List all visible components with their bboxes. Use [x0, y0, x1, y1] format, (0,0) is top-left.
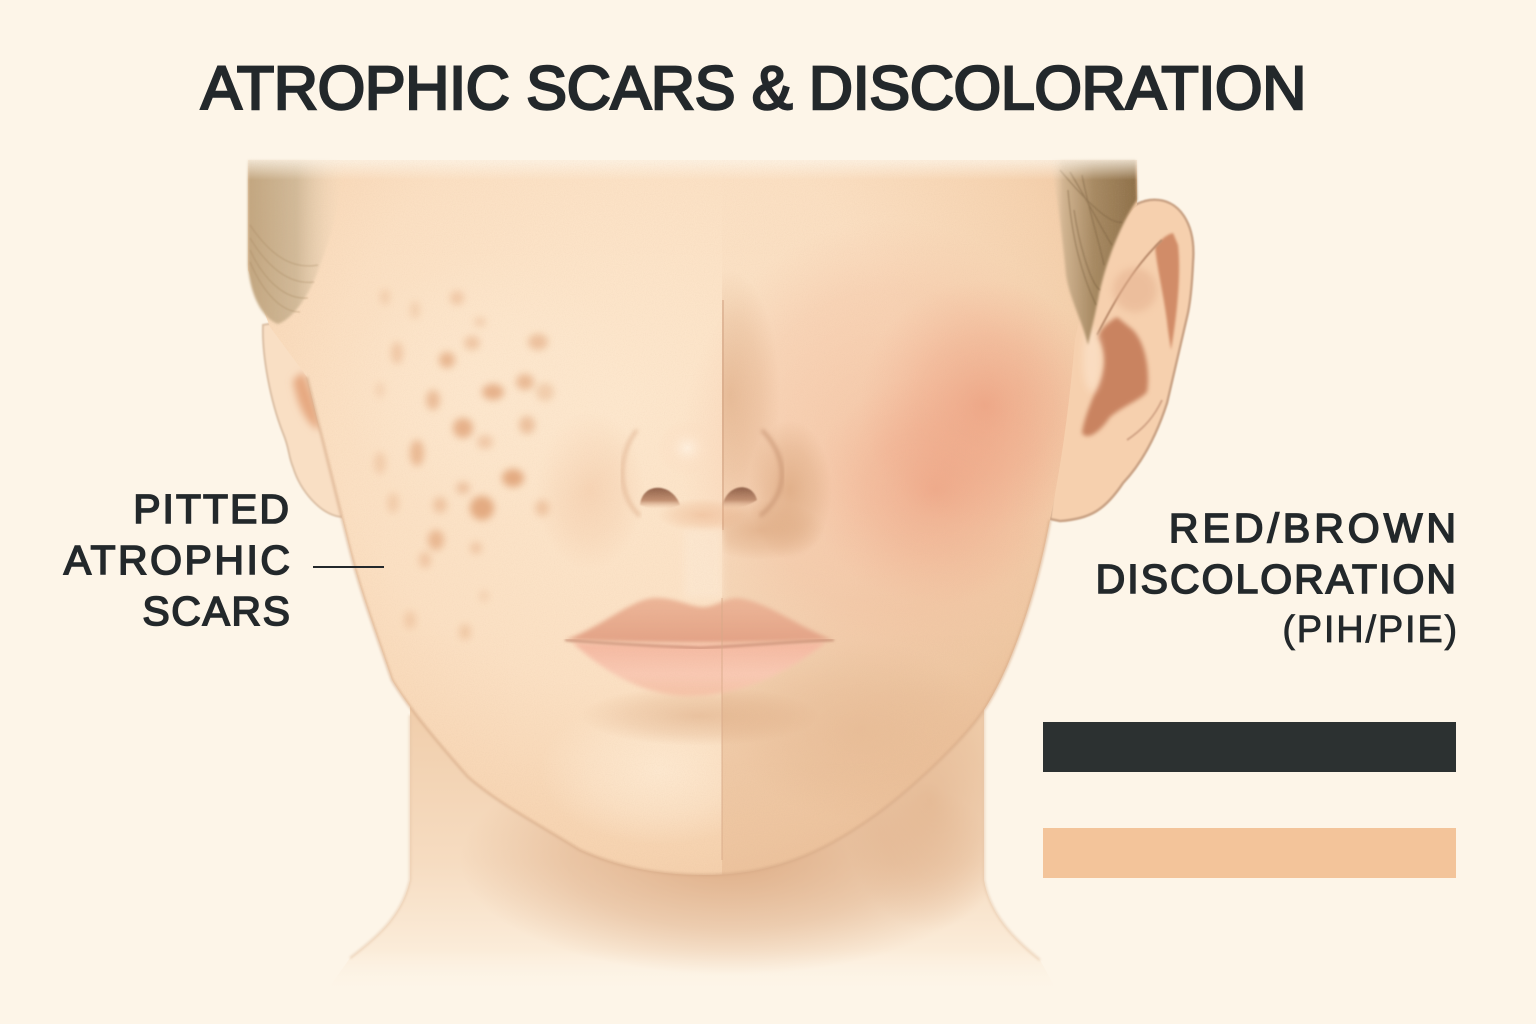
skin grain	[240, 160, 1140, 880]
philtrum	[684, 530, 722, 598]
label: pitted atrophic scars: ATROPHIC	[64, 537, 292, 583]
fade at top of face	[236, 148, 1148, 180]
discoloration patch on right cheek	[720, 272, 1072, 610]
lips	[565, 598, 834, 696]
left ear	[263, 320, 345, 517]
right ear	[1050, 200, 1193, 521]
left hair	[248, 160, 345, 324]
pitted atrophic scars	[374, 289, 554, 640]
label: pitted atrophic scars: SCARS	[142, 588, 292, 634]
label: pitted atrophic scars: PITTED	[133, 486, 291, 532]
peach legend bar	[1043, 828, 1456, 878]
centre divider	[721, 598, 723, 860]
face illustration	[246, 159, 1456, 972]
label: red/brown discoloration: (PIH/PIE)	[1282, 609, 1459, 651]
face base	[248, 160, 1137, 875]
right hair	[1050, 160, 1137, 345]
label: pitted atrophic scars	[62, 486, 292, 634]
label: red/brown discoloration: RED/BROWN	[1169, 505, 1460, 551]
label: red/brown discoloration: DISCOLORATION	[1096, 556, 1458, 602]
dark legend bar	[1043, 722, 1456, 772]
jaw outline	[307, 377, 1050, 875]
title: ATROPHIC SCARS & DISCOLORATION	[201, 54, 1306, 122]
label: red/brown discoloration	[1096, 505, 1460, 651]
neck	[348, 707, 1041, 972]
face shading	[554, 442, 1042, 874]
leader line	[313, 566, 384, 568]
nose	[620, 291, 824, 554]
